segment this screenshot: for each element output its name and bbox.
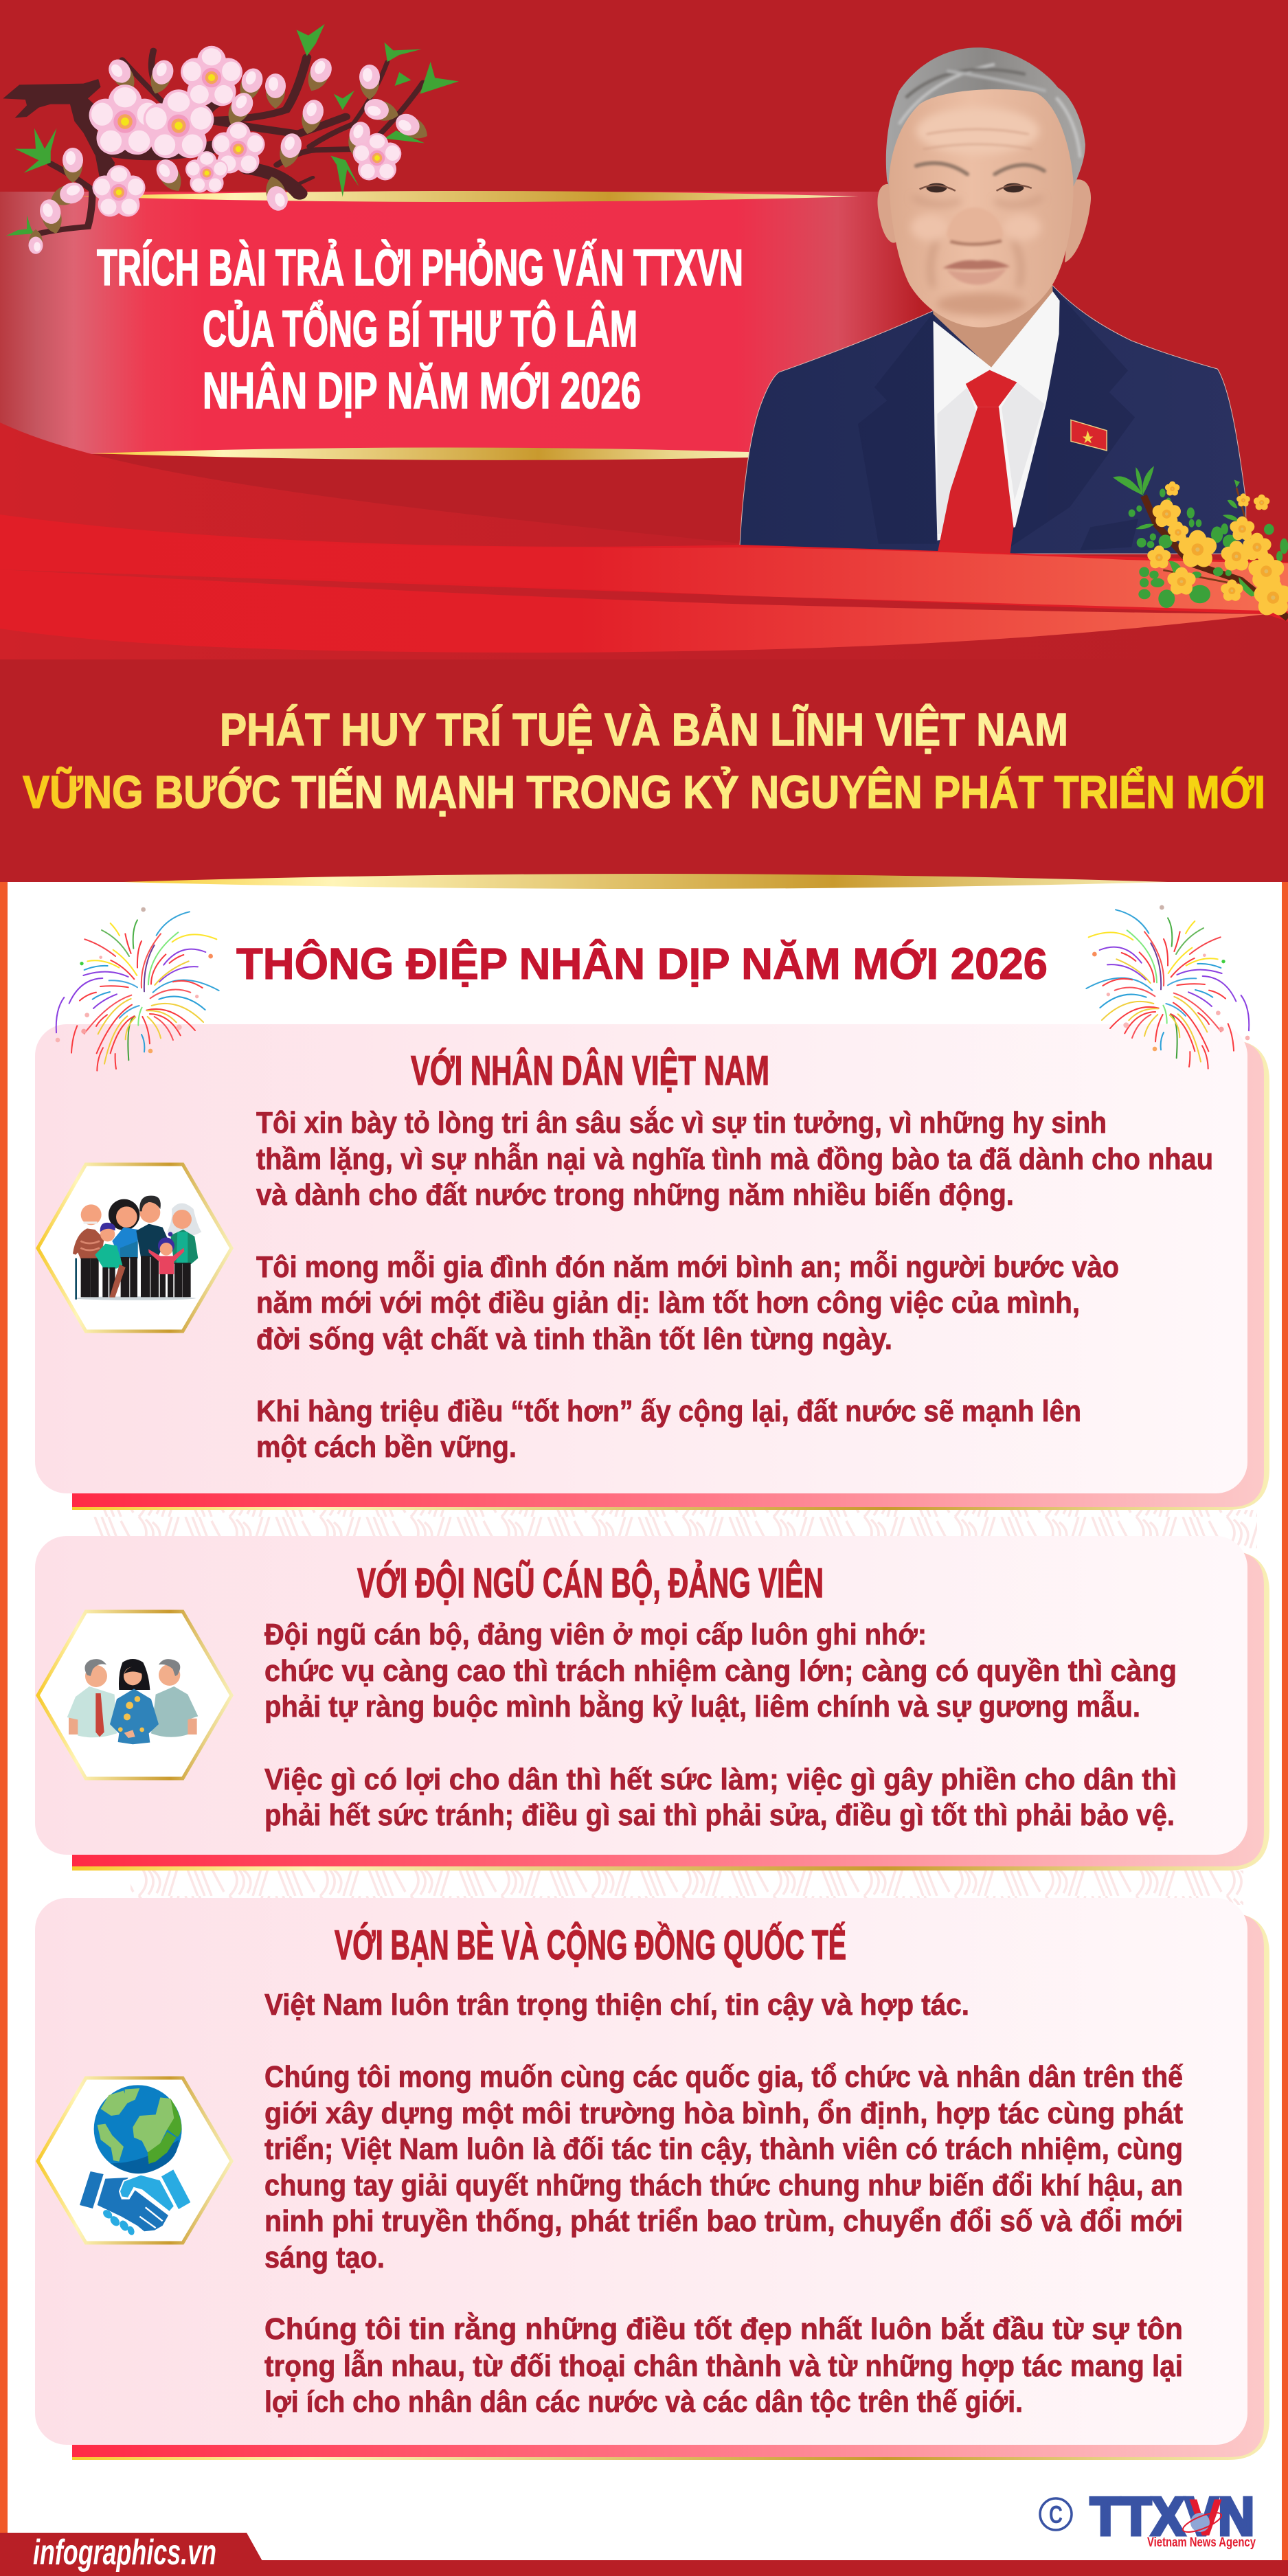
leaves	[6, 24, 459, 236]
title text: CỦA TỔNG BÍ THƯ TÔ LÂM	[203, 300, 637, 357]
portrait: nose	[947, 207, 1003, 245]
portrait: lapels	[858, 287, 1138, 550]
card 3 heading: VỚI BẠN BÈ VÀ CỘNG ĐỒNG QUỐC TẾ	[335, 1922, 846, 1968]
peach blossom branch	[3, 24, 459, 254]
woman in ao dai	[110, 1659, 159, 1744]
hexagon icon: officials	[38, 1612, 231, 1778]
card 3 body: chung tay giải quyết những thách thức chung như biến đổi khí hậu, an	[264, 2169, 1183, 2202]
card 2 body: chức vụ càng cao thì trách nhiệm càng lớn; càng có quyền thì càng	[264, 1654, 1177, 1688]
title text: TRÍCH BÀI TRẢ LỜI PHỎNG VẤN TTXVN	[97, 239, 743, 296]
girl	[148, 1232, 184, 1297]
footer site name: infographics.vn	[33, 2533, 216, 2573]
card 1 body: và dành cho đất nước trong những năm nhiều biến động.	[256, 1178, 1014, 1212]
section heading: THÔNG ĐIỆP NHÂN DỊP NĂM MỚI 2026	[236, 938, 1048, 988]
card 3 body	[264, 1988, 1183, 2419]
portrait: face	[889, 89, 1074, 328]
father	[136, 1196, 167, 1297]
copyright mark: C	[1049, 2500, 1063, 2529]
apricot blossom branch	[1113, 466, 1288, 619]
gold divider above panel	[124, 874, 1168, 889]
card 1 body: Tôi xin bày tỏ lòng tri ân sâu sắc vì sự tin tưởng, vì những hy sinh	[256, 1105, 1107, 1140]
grandmother	[167, 1204, 201, 1297]
globe	[94, 2085, 182, 2173]
banner gold top strip	[79, 191, 859, 202]
card 1 body: đời sống vật chất và tinh thần tốt lên từng ngày.	[256, 1322, 892, 1356]
card 3 body: sáng tạo.	[264, 2241, 385, 2274]
logo TTXVN: TTXVN	[1090, 2486, 1254, 2546]
copyright mark	[1040, 2498, 1072, 2530]
hexagon icon: family	[38, 1164, 231, 1331]
man with tie	[67, 1659, 117, 1737]
card 1 heading: VỚI NHÂN DÂN VIỆT NAM	[411, 1048, 769, 1094]
panel: card 3	[35, 1898, 1269, 2460]
twigs	[1163, 488, 1249, 585]
yellow flowers	[1146, 482, 1288, 619]
portrait	[739, 47, 1246, 554]
panel: card 2	[35, 1536, 1269, 1871]
portrait: eyes	[920, 183, 1032, 192]
green buds	[1129, 488, 1288, 608]
card 3 body: Việt Nam luôn trân trọng thiện chí, tin cậy và hợp tác.	[264, 1988, 969, 2022]
card 3 body: giới xây dựng một môi trường hòa bình, ổn định, hợp tác cùng phát	[264, 2097, 1183, 2130]
card 3 body: Chúng tôi tin rằng những điều tốt đẹp nhất luôn bắt đầu từ sự tôn	[264, 2312, 1183, 2346]
portrait: flag pin	[1071, 420, 1107, 451]
green leaves	[1113, 466, 1257, 596]
portrait: collar shadow	[937, 383, 1044, 534]
portrait: suit	[739, 286, 1246, 554]
panel: card 1	[35, 1024, 1269, 1510]
card 1 body	[256, 1105, 1213, 1464]
card 1 body: Tôi mong mỗi gia đình đón năm mới bình an; mỗi người bước vào	[256, 1250, 1119, 1284]
card 2 body: phải hết sức tránh; điều gì sai thì phải sửa, điều gì tốt thì phải bảo vệ.	[264, 1798, 1175, 1832]
grandfather	[73, 1204, 104, 1297]
mother	[109, 1199, 139, 1297]
boy	[95, 1223, 126, 1298]
fireworks left	[56, 907, 219, 1071]
headline: PHÁT HUY TRÍ TUỆ VÀ BẢN LĨNH VIỆT NAM	[220, 704, 1068, 756]
logo TTXVN: Vietnam News Agency	[1147, 2535, 1256, 2550]
footer band	[0, 2560, 1288, 2576]
buds	[29, 55, 432, 254]
headline	[23, 704, 1265, 818]
card 1 body: thầm lặng, vì sự nhẫn nại và nghĩa tình mà đồng bào ta đã dành cho nhau	[256, 1142, 1213, 1176]
officials illustration	[67, 1659, 198, 1744]
portrait: neck	[930, 251, 1053, 369]
portrait: face shading	[911, 108, 1043, 316]
card 2 heading: VỚI ĐỘI NGŨ CÁN BỘ, ĐẢNG VIÊN	[357, 1560, 824, 1606]
card 3 body: Chúng tôi mong muốn cùng các quốc gia, tổ chức và nhân dân trên thế	[264, 2060, 1183, 2094]
card 2 body: Việc gì có lợi cho dân thì hết sức làm; việc gì gây phiền cho dân thì	[264, 1763, 1177, 1796]
hexagon icon: globe and handshake	[38, 2078, 231, 2243]
card 3 body: triển; Việt Nam luôn là đối tác tin cậy, thành viên có trách nhiệm, cùng	[264, 2132, 1183, 2166]
title text: NHÂN DỊP NĂM MỚI 2026	[203, 362, 641, 419]
fireworks right	[1086, 905, 1250, 1069]
portrait: hair	[886, 47, 1085, 194]
salmon swoosh lower	[0, 569, 1266, 653]
portrait: forehead lines	[923, 129, 1032, 149]
title text	[97, 239, 743, 419]
man in shirt	[151, 1659, 198, 1737]
handshake	[80, 2169, 190, 2236]
portrait: hair strands	[899, 65, 1080, 157]
header ribbon banner	[0, 192, 920, 454]
card 1 body: năm mới với một điều giản dị: làm tốt hơn công việc của mình,	[256, 1286, 1080, 1320]
blossoms	[84, 46, 405, 222]
card 3 body: lợi ích cho nhân dân các nước và các dân tộc trên thế giới.	[264, 2385, 1023, 2419]
card 3 body: ninh phi truyền thống, phát triển bao trùm, chuyển đổi số và đổi mới	[264, 2204, 1183, 2238]
footer tab	[0, 2533, 263, 2576]
banner gold bottom strip	[92, 447, 749, 460]
portrait: tie	[937, 370, 1017, 554]
card 3 body: trọng lẫn nhau, từ đối thoại chân thành và từ những hợp tác mang lại	[264, 2349, 1183, 2383]
red swoosh band in front of portrait	[0, 515, 1288, 622]
family illustration	[73, 1196, 201, 1300]
card 2 body: phải tự ràng buộc mình bằng kỷ luật, liêm chính và sự gương mẫu.	[264, 1689, 1140, 1724]
card 2 body	[264, 1618, 1177, 1832]
drum pattern between cards	[89, 1510, 1257, 1905]
portrait: eyebrows	[916, 163, 1044, 174]
portrait: shirt	[933, 291, 1060, 541]
branch	[1144, 496, 1288, 618]
card 1 body: một cách bền vững.	[256, 1430, 517, 1464]
portrait: mouth	[942, 260, 1010, 285]
salmon swoosh upper	[0, 522, 1288, 611]
red swoosh behind portrait	[0, 422, 1288, 659]
branches	[3, 50, 423, 234]
content panel	[0, 882, 1288, 2560]
card 2 body: Đội ngũ cán bộ, đảng viên ở mọi cấp luôn ghi nhớ:	[264, 1618, 927, 1651]
card 1 body: Khi hàng triệu điều “tốt hơn” ấy cộng lại, đất nước sẽ mạnh lên	[256, 1394, 1081, 1428]
logo TTXVN: V	[1189, 2489, 1222, 2547]
portrait: ears	[878, 179, 1091, 262]
